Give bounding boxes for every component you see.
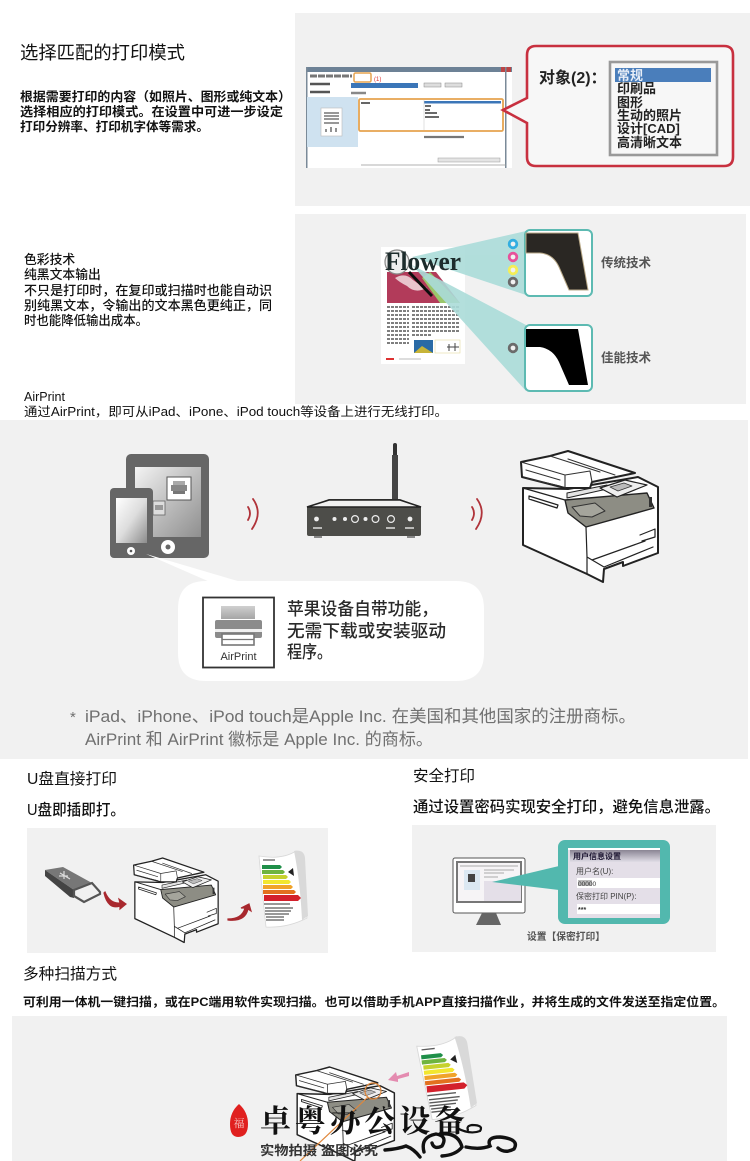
callout: user info dialog: 用户名(U):: [576, 866, 613, 876]
callout: target list: 高清晰文本: [617, 135, 682, 150]
icon: monitor: [453, 858, 525, 925]
footnote: trademarks: [70, 707, 636, 749]
icon: printer: [296, 1067, 394, 1161]
panel: black text comparison: [295, 214, 746, 404]
text block: color technology: 纯黑文本输出: [24, 267, 101, 282]
callout: user info dialog: 用户信息设置: [573, 851, 621, 861]
text: built-in feature: 苹果设备自带功能，: [287, 599, 438, 619]
label: Canon technology: 佳能技术: [601, 350, 652, 365]
panel: print mode dialog: [295, 13, 750, 206]
text block: secure print: 通过设置密码实现安全打印，避免信息泄露。: [413, 797, 720, 816]
screenshot: driver dialog: [306, 67, 512, 168]
text: built-in feature: 程序。: [287, 642, 332, 662]
text block: print mode description: [20, 89, 291, 134]
text block: AirPrint intro: 通过AirPrint，即可从iPad、iPone、iPod touch等设备上进行无线打印。: [24, 404, 448, 419]
screenshot: driver dialog: (1): [374, 77, 381, 83]
icon: printer: [521, 451, 658, 582]
arrow: USB to printer: [104, 892, 126, 909]
panel: secure print: [412, 825, 716, 952]
pointer beam: [492, 866, 559, 890]
icon: AirPrint: AirPrint: [220, 651, 257, 663]
text block: AirPrint intro: [24, 390, 448, 419]
callout: target list: 印刷品: [617, 81, 656, 96]
heading: print mode: 选择匹配的打印模式: [20, 43, 185, 63]
icon: router: [307, 445, 421, 537]
heading: secure print: 安全打印: [413, 767, 475, 785]
title: Flower: Flower: [385, 247, 461, 276]
panel: USB printing: [27, 828, 328, 953]
text block: AirPrint intro: AirPrint: [24, 390, 66, 404]
icon: USB drive: [45, 867, 100, 902]
magnifier: [385, 250, 409, 274]
footnote: trademarks: *: [70, 709, 76, 726]
CMYK dots: [509, 240, 517, 352]
text: built-in feature: 无需下载或安装驱动: [287, 621, 446, 641]
callout: target list: 设计[CAD]: [617, 121, 680, 136]
callout: target list: 对象(2)：: [539, 68, 607, 87]
caption: secure print setting: 设置【保密打印】: [527, 930, 605, 943]
callout: AirPrint bubble: [146, 554, 484, 681]
icon: red seal: 福: [234, 1115, 244, 1131]
callout: user info dialog: 00000: [578, 881, 596, 888]
text block: print mode description: 根据需要打印的内容（如照片、图形或纯文本）: [20, 89, 291, 104]
callout: target list: [503, 46, 733, 166]
callout: user info dialog: 保密打印 PIN(P):: [576, 891, 636, 901]
callout: target list: 生动的照片: [617, 108, 682, 123]
text: built-in feature: [287, 599, 446, 662]
arrow: wireless waves left: [248, 499, 258, 529]
callout: target list: 图形: [617, 95, 643, 110]
document sample: [381, 247, 465, 364]
panel: AirPrint: [0, 420, 748, 759]
heading: scan modes: 多种扫描方式: [23, 965, 117, 983]
footnote: trademarks: iPad、iPhone、iPod touch是Apple Inc. 在美国和其他国家的注册商标。: [85, 707, 636, 726]
text block: color technology: 别纯黑文本，令输出的文本黑色更纯正，同: [24, 298, 272, 313]
arrow: wireless waves right: [472, 499, 482, 529]
magnified beams: [412, 231, 526, 391]
text block: color technology: [24, 252, 272, 328]
orange scan marker: [300, 1083, 381, 1161]
icon: AirPrint: [203, 598, 274, 668]
arrow: document to printer: [388, 1072, 409, 1082]
zoom box: Canon technology: [525, 325, 592, 391]
callout: user info dialog: ***: [578, 907, 586, 914]
label: conventional technology: 传统技术: [601, 255, 652, 270]
zoom box: conventional technology: [525, 230, 592, 296]
arrow: printer to document: [228, 904, 251, 920]
callout: user info dialog: [558, 840, 670, 924]
text block: USB printing: U盘即插即打。: [27, 801, 125, 819]
decoration: clouds: [385, 1125, 515, 1157]
icon: energy label document: [259, 851, 308, 927]
text block: color technology: 不只是打印时，在复印或扫描时也能自动识: [24, 283, 272, 298]
heading: USB printing: U盘直接打印: [27, 769, 117, 788]
text block: print mode description: 打印分辨率、打印机字体等需求。: [20, 119, 209, 134]
watermark: anti-theft note: 实物拍摄 盗图必究: [260, 1143, 378, 1158]
icon: energy label document: [416, 1035, 478, 1120]
text block: color technology: 时也能降低输出成本。: [24, 313, 148, 328]
panel: scan modes: [12, 1016, 727, 1161]
icon: printer: [134, 858, 218, 942]
footnote: trademarks: AirPrint 和 AirPrint 徽标是 Apple Inc. 的商标。: [85, 730, 433, 749]
watermark: shop name: 卓粤办公设备: [260, 1096, 465, 1141]
callout: target list: 常规: [617, 68, 643, 83]
text block: color technology: 色彩技术: [24, 252, 75, 267]
icon: red seal: [230, 1104, 248, 1137]
icon: tablet and phone: [110, 454, 209, 558]
text block: print mode description: 选择相应的打印模式。在设置中可进一步设定: [20, 104, 284, 119]
text block: scan modes: 可利用一体机一键扫描，或在PC端用软件实现扫描。也可以借助手机APP直接扫描作业，并将生成的文件发送至指定位置。: [23, 994, 725, 1009]
